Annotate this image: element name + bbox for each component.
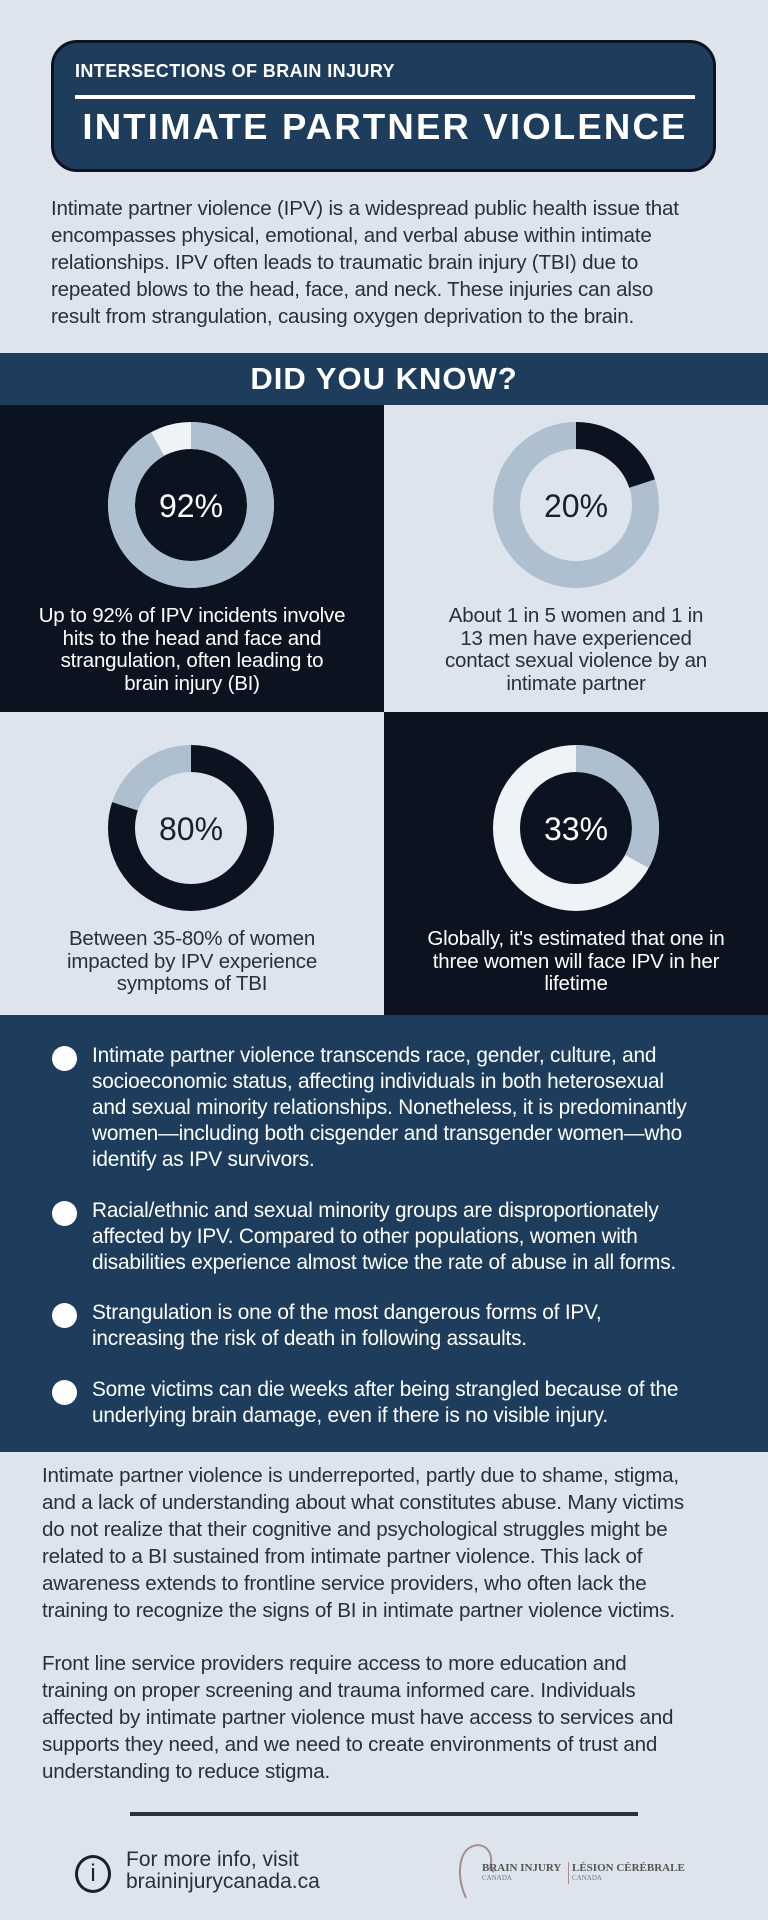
- closing paragraph 1: do not realize that their cognitive and psychological struggles might be: [42, 1518, 668, 1541]
- donut 80: 80%: [159, 811, 223, 847]
- caption 92: brain injury (BI): [124, 672, 260, 694]
- caption 20: 13 men have experienced: [460, 626, 692, 650]
- donut 33: 33%: [544, 811, 608, 847]
- intro paragraph: Intimate partner violence (IPV) is a widespread public health issue that: [51, 197, 679, 220]
- intro paragraph: relationships. IPV often leads to traumatic brain injury (TBI) due to: [51, 251, 638, 274]
- caption 20: intimate partner: [506, 672, 646, 694]
- did you know banner: DID YOU KNOW?: [250, 361, 518, 396]
- footer info text: For more info, visit: [126, 1848, 299, 1871]
- intro paragraph: repeated blows to the head, face, and neck. These injuries can also: [51, 278, 653, 301]
- bullet 2: affected by IPV. Compared to other populations, women with: [92, 1225, 638, 1248]
- caption 33: lifetime: [544, 972, 608, 995]
- bullet facts panel: [0, 1015, 768, 1452]
- bullet 3: Strangulation is one of the most dangerous forms of IPV,: [92, 1301, 601, 1324]
- caption 92: strangulation, often leading to: [61, 649, 323, 672]
- donut 33: [493, 745, 659, 911]
- bullet 2: Racial/ethnic and sexual minority groups are disproportionately: [92, 1199, 659, 1222]
- closing paragraph 1: [42, 1464, 684, 1622]
- bullet 1: socioeconomic status, affecting individuals in both heterosexual: [92, 1070, 664, 1093]
- footer info text: braininjurycanada.ca: [126, 1870, 320, 1893]
- bullet 1: [52, 1044, 687, 1171]
- bullet 4: [52, 1378, 678, 1427]
- bullet 1: identify as IPV survivors.: [92, 1148, 314, 1171]
- stat grid: [0, 405, 768, 1015]
- caption 20: About 1 in 5 women and 1 in: [449, 604, 703, 627]
- intro paragraph: result from strangulation, causing oxygen deprivation to the brain.: [51, 305, 634, 328]
- donut 20: 20%: [544, 488, 608, 524]
- stat 80%: [0, 712, 384, 1015]
- logo: CANADA: [572, 1874, 602, 1882]
- caption 92: hits to the head and face and: [63, 626, 321, 650]
- main title: INTIMATE PARTNER VIOLENCE: [82, 106, 688, 147]
- caption 92: Up to 92% of IPV incidents involve: [39, 604, 345, 627]
- donut 92: [108, 422, 274, 588]
- subtitle: INTERSECTIONS OF BRAIN INJURY: [75, 61, 395, 81]
- closing paragraph 1: related to a BI sustained from intimate partner violence. This lack of: [42, 1545, 642, 1568]
- donut 92: 92%: [159, 488, 223, 524]
- closing paragraph 2: training on proper screening and trauma informed care. Individuals: [42, 1679, 636, 1702]
- logo: BRAIN INJURY: [482, 1862, 561, 1874]
- caption 33: three women will face IPV in her: [433, 950, 719, 972]
- caption 92: [39, 604, 345, 694]
- divider line: [75, 95, 695, 99]
- caption 33: [427, 927, 725, 995]
- bullet 3: increasing the risk of death in following assaults.: [92, 1327, 527, 1350]
- closing paragraph 1: training to recognize the signs of BI in intimate partner violence victims.: [42, 1599, 675, 1622]
- caption 80: [67, 927, 317, 995]
- bullet 1: women—including both cisgender and transgender women—who: [92, 1122, 682, 1145]
- logo: LÉSION CÉRÉBRALE: [572, 1862, 685, 1874]
- footer info text: [126, 1848, 320, 1893]
- bullet 2: disabilities experience almost twice the rate of abuse in all forms.: [92, 1251, 676, 1274]
- closing paragraph 2: supports they need, and we need to create environments of trust and: [42, 1733, 657, 1756]
- logo: CANADA: [482, 1874, 512, 1882]
- closing paragraph 2: [42, 1652, 673, 1783]
- caption 20: [445, 604, 707, 694]
- closing paragraph 1: Intimate partner violence is underreported, partly due to shame, stigma,: [42, 1464, 679, 1487]
- donut 20: [493, 422, 659, 588]
- caption 80: Between 35-80% of women: [69, 927, 315, 950]
- intro paragraph: encompasses physical, emotional, and verbal abuse within intimate: [51, 224, 652, 247]
- header box: [51, 40, 716, 172]
- stat 20%: [384, 405, 768, 712]
- closing paragraph 2: Front line service providers require access to more education and: [42, 1652, 627, 1675]
- caption 33: Globally, it's estimated that one in: [427, 927, 725, 950]
- bullet 4: Some victims can die weeks after being strangled because of the: [92, 1378, 678, 1401]
- closing paragraph 1: and a lack of understanding about what constitutes abuse. Many victims: [42, 1491, 684, 1514]
- icon: info: i: [90, 1860, 96, 1887]
- caption 80: symptoms of TBI: [117, 972, 267, 995]
- stat 92%: [0, 405, 384, 712]
- closing paragraph 2: understanding to reduce stigma.: [42, 1760, 330, 1783]
- bullet 3: [52, 1301, 601, 1350]
- caption 20: contact sexual violence by an: [445, 649, 707, 672]
- did you know banner: [0, 353, 768, 405]
- bullet 4: underlying brain damage, even if there is no visible injury.: [92, 1404, 608, 1427]
- bullet 1: Intimate partner violence transcends race, gender, culture, and: [92, 1044, 656, 1067]
- intro paragraph: [51, 197, 679, 328]
- bullet 1: and sexual minority relationships. Nonetheless, it is predominantly: [92, 1096, 687, 1119]
- closing paragraph 1: awareness extends to frontline service providers, who often lack the: [42, 1572, 647, 1595]
- donut 80: [108, 745, 274, 911]
- closing paragraph 2: affected by intimate partner violence must have access to services and: [42, 1706, 673, 1729]
- logo: [458, 1844, 685, 1898]
- icon: info: [75, 1855, 111, 1893]
- bullet 2: [52, 1199, 676, 1274]
- caption 80: impacted by IPV experience: [67, 950, 317, 972]
- stat 33%: [384, 712, 768, 1015]
